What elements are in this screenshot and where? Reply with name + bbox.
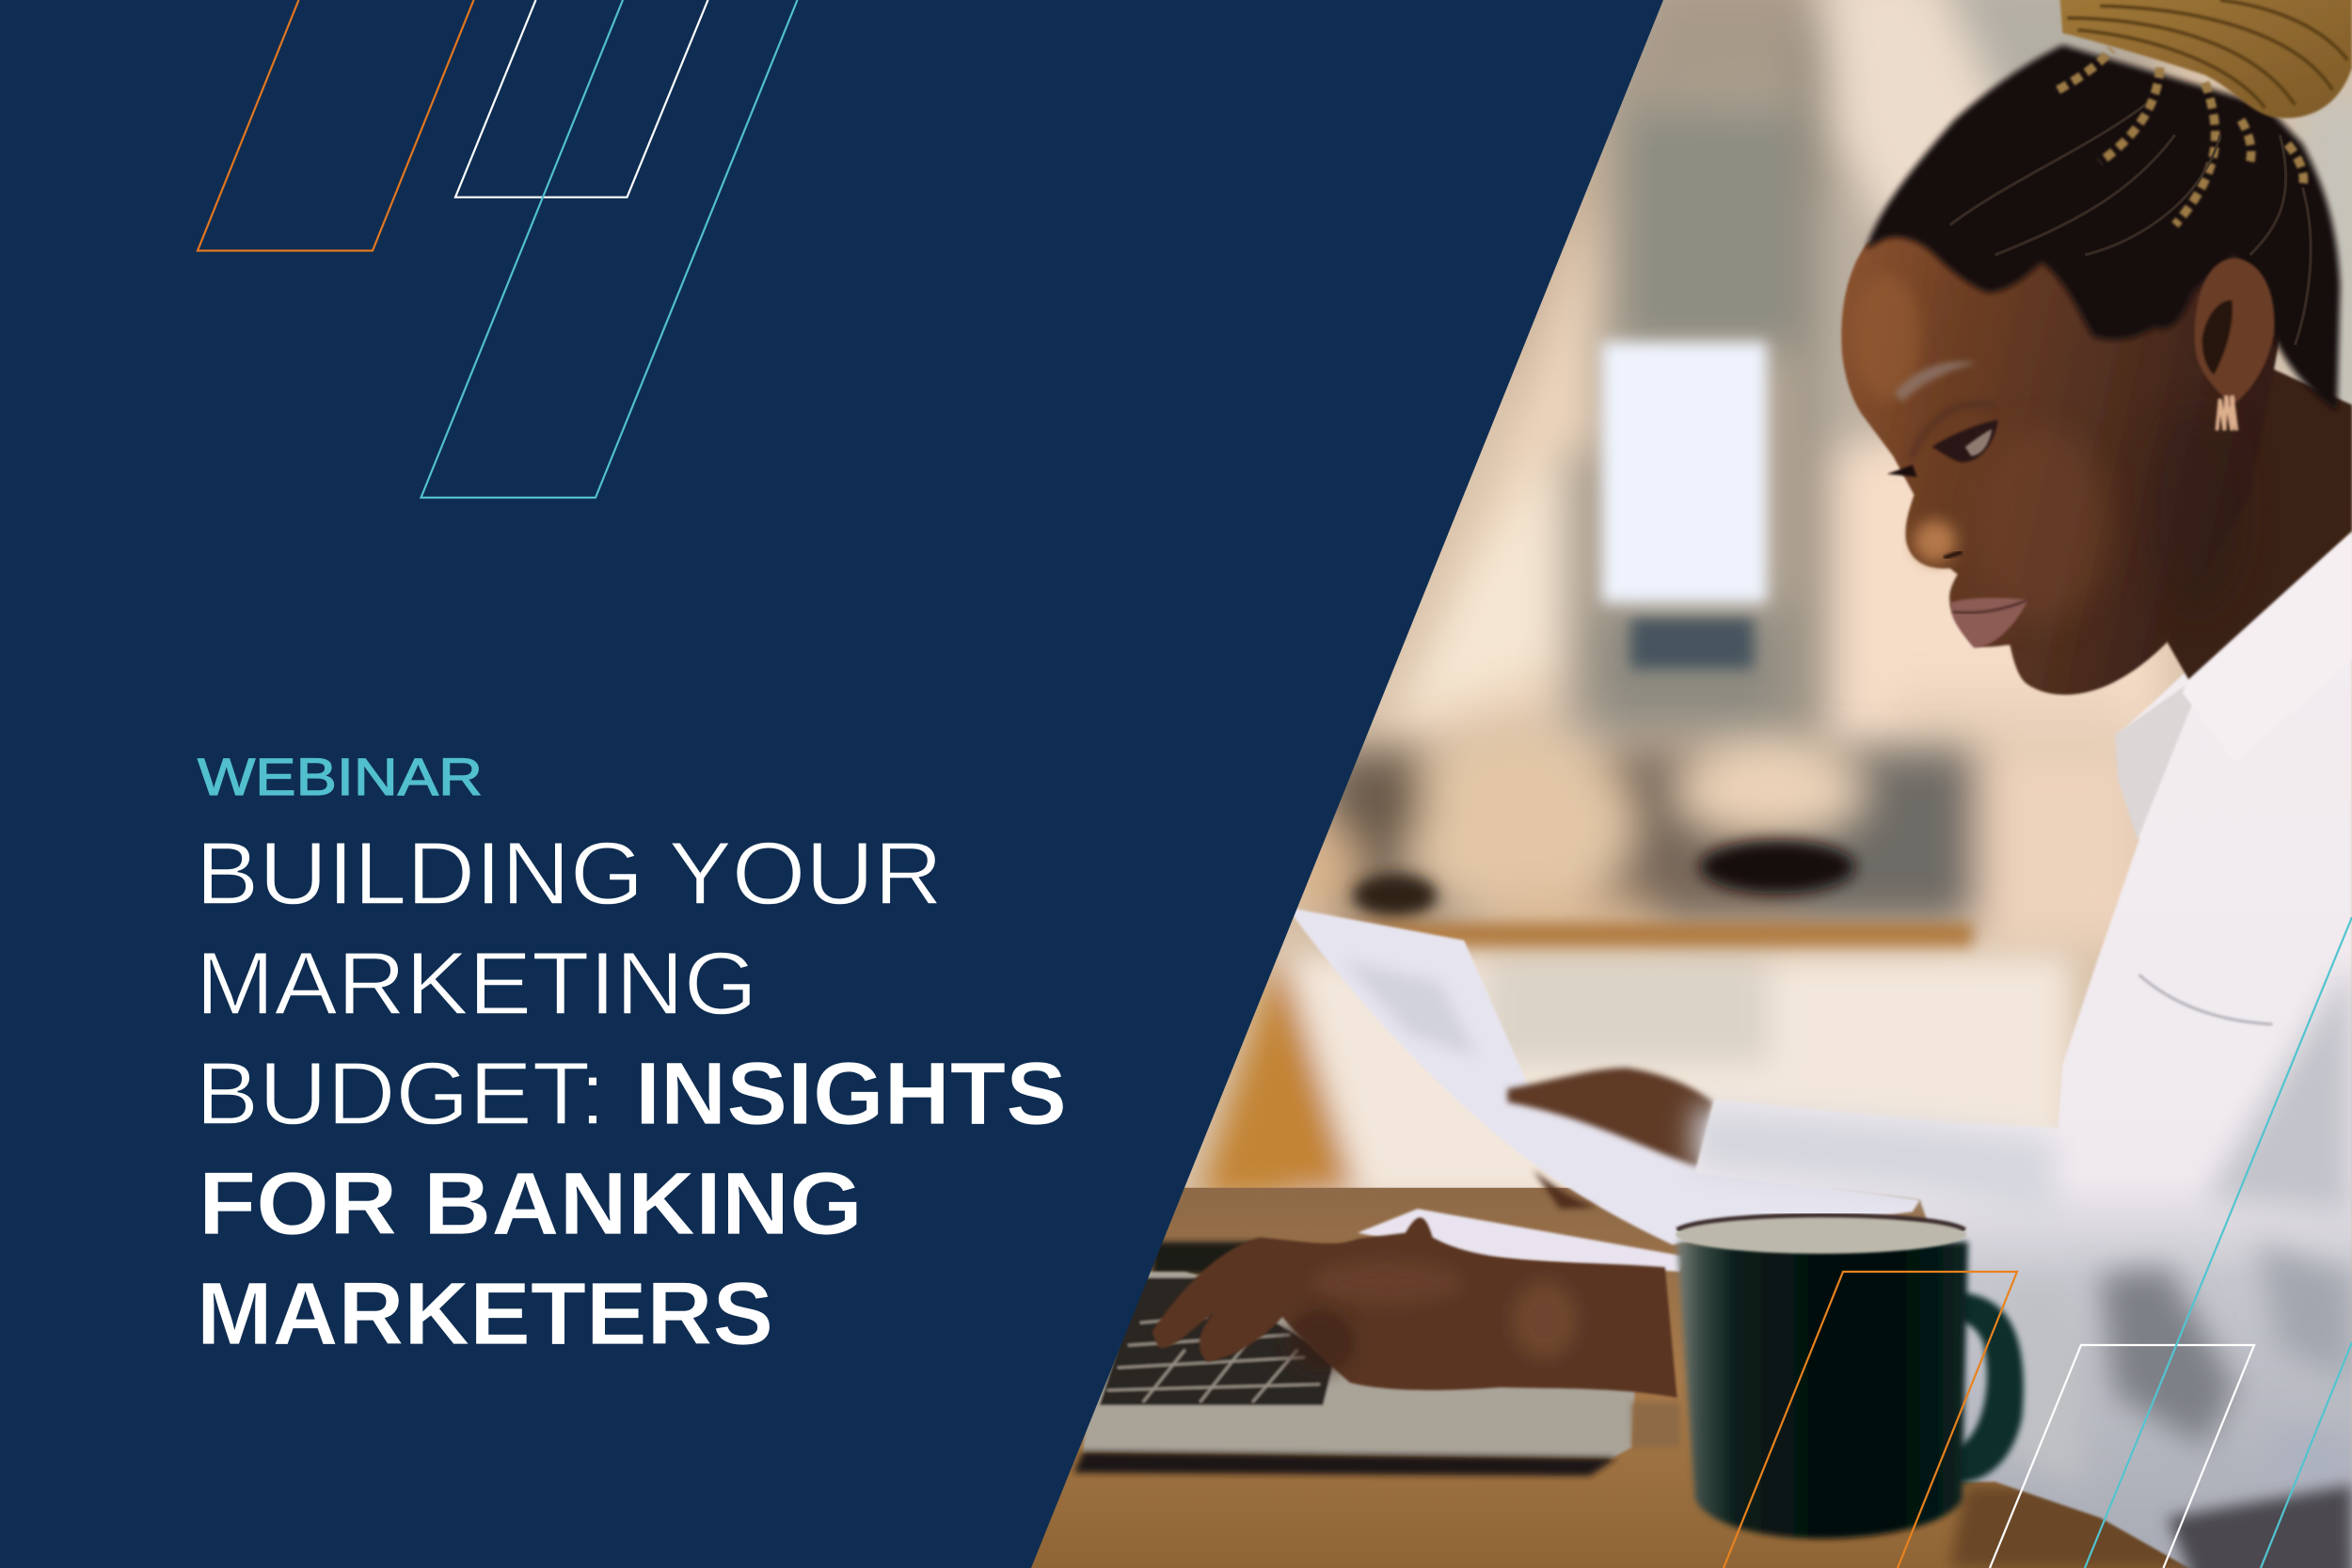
braids bbox=[2058, 50, 2304, 225]
window bbox=[1602, 342, 1767, 669]
laptop bbox=[1074, 1272, 1635, 1476]
table bbox=[1020, 1188, 2205, 1568]
lips bbox=[1950, 598, 2028, 648]
woman: ear and earring bbox=[2195, 258, 2275, 431]
kitchen items and shelf bbox=[1282, 732, 2145, 944]
blurred room background bbox=[1380, 0, 2352, 750]
photo: woman working at laptop with documents bbox=[1020, 0, 2352, 1568]
decorative outline: cyan parallelogram top bbox=[421, 0, 798, 498]
collar bbox=[2183, 532, 2352, 762]
sheet of paper on table bbox=[1358, 1209, 1688, 1272]
typing hand bbox=[1152, 1217, 1677, 1398]
nostril bbox=[1944, 552, 1962, 558]
title line 5: MARKETERS bbox=[197, 1264, 773, 1364]
shirt folds and shadows bbox=[1695, 959, 2352, 1499]
title bbox=[196, 824, 1067, 1364]
decorative outline: white parallelogram bottom bbox=[1990, 1345, 2254, 1568]
title line 1: BUILDING YOUR bbox=[196, 824, 943, 924]
decorative outline: white parallelogram top bbox=[455, 0, 707, 198]
held document bbox=[1287, 908, 1920, 1244]
navy panel bbox=[0, 0, 1663, 1568]
hand holding document bbox=[1507, 1068, 1713, 1209]
mug bbox=[1676, 1214, 2024, 1539]
title line 3 light part: BUDGET: bbox=[196, 1044, 606, 1144]
eyebrow: webinar label: WEBINAR bbox=[198, 747, 483, 806]
woman: hair bbox=[1866, 45, 2340, 411]
eye bbox=[1932, 420, 1998, 462]
title line 3 bold part: INSIGHTS bbox=[635, 1044, 1067, 1144]
woman: hair bun bbox=[2059, 0, 2352, 119]
shirt bbox=[1695, 532, 2352, 1568]
decorative line: cyan long bbox=[2085, 917, 2352, 1568]
decorative line: cyan short bbox=[2261, 1342, 2352, 1568]
woman: neck bbox=[2130, 345, 2352, 679]
title line 4: FOR BANKING bbox=[199, 1154, 863, 1254]
decorative outline: orange parallelogram top bbox=[198, 0, 474, 250]
decorative outline: orange parallelogram bottom bbox=[1724, 1272, 2017, 1568]
title line 2: MARKETING bbox=[196, 934, 757, 1034]
woman: face bbox=[1841, 195, 2280, 695]
brow bbox=[1895, 361, 1977, 402]
title line 3 bbox=[196, 1044, 1067, 1144]
